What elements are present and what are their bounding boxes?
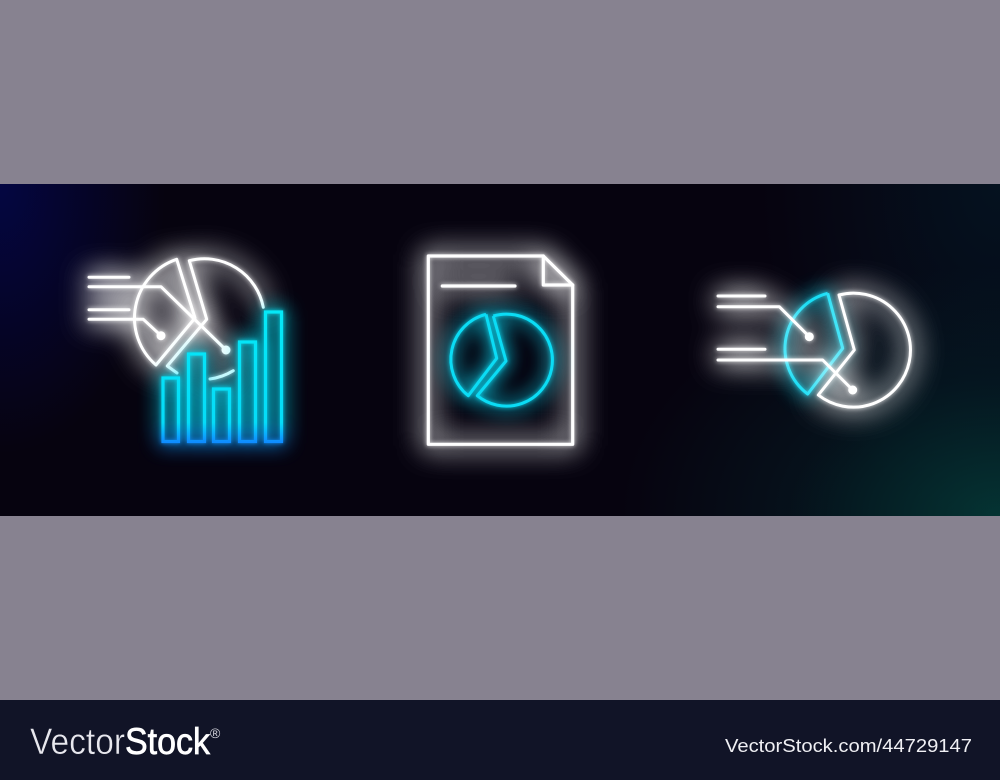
- logo: VectorStock: Stock: [125, 721, 210, 762]
- icon: pie chart with callouts: [718, 293, 910, 407]
- bar chart: [163, 312, 282, 442]
- background band: [0, 184, 1000, 516]
- document outline: [428, 256, 573, 444]
- icon: pie chart and bar chart: [89, 259, 282, 442]
- white pie slice and callout lines: [718, 293, 910, 407]
- logo: VectorStock: [30, 721, 221, 762]
- logo: VectorStock: Vector: [30, 721, 125, 762]
- document pie chart: [451, 314, 552, 406]
- icon: document with pie chart: [428, 256, 573, 444]
- footer url: VectorStock.com/44729147: [725, 736, 972, 756]
- footer bar: [0, 700, 1000, 780]
- cyan pie slice: [785, 293, 843, 394]
- pie chart with callout lines: [89, 259, 263, 379]
- logo: VectorStock: ®: [210, 725, 221, 741]
